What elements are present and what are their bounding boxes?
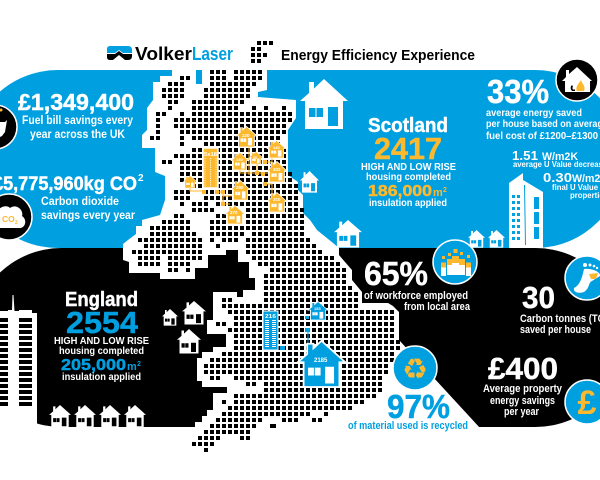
orange tower 5x18 xyxy=(203,148,218,188)
house: small white on blue 2 xyxy=(488,230,505,248)
blue tower 216 xyxy=(263,311,285,350)
orange house 140 right: 140 xyxy=(273,145,280,150)
logo: VolkerLaser: Volker xyxy=(135,44,192,64)
icon: CO2 cloud: 2 xyxy=(15,220,18,226)
icon: house with flame xyxy=(556,59,598,101)
orange house 333 xyxy=(268,162,286,182)
orange house 140 left: 140 xyxy=(236,157,243,162)
panel: black band xyxy=(0,248,600,427)
blue house 2185 xyxy=(300,328,343,386)
text: England stats: housing completed xyxy=(59,346,144,357)
text: England stats: 2554 xyxy=(66,305,139,340)
text: Scotland stats: 186,000 xyxy=(368,183,432,200)
house: large white xyxy=(300,79,348,129)
orange house 270 xyxy=(226,206,244,224)
orange house 220: 220 xyxy=(242,133,250,138)
text: 33 percent energy saved: average energy saved xyxy=(486,107,582,119)
text: 400 pounds savings: £400 xyxy=(488,351,558,386)
text: 97 percent recycled xyxy=(348,388,468,432)
text: carbon dioxide savings: savings every year xyxy=(41,210,135,222)
white house row on black xyxy=(49,405,146,428)
icon: pound coin: £ xyxy=(578,384,597,422)
text: England stats: 2 xyxy=(137,361,141,368)
icon: CO2 cloud xyxy=(0,194,32,240)
text: Scotland stats: m xyxy=(433,187,443,199)
text: England stats: HIGH AND LOW RISE xyxy=(54,336,149,347)
orange house 140 left xyxy=(232,153,248,170)
text: U values: 1.51 xyxy=(512,148,538,163)
map: pixel dots xyxy=(132,72,400,450)
orange house small: 88 xyxy=(253,156,257,160)
map: blue notch xyxy=(196,70,202,84)
text: 65 percent workforce: of workforce employed xyxy=(364,290,468,302)
text: 400 pounds savings: Average property xyxy=(483,383,563,395)
icon: savings circle xyxy=(0,105,17,149)
text: fuel bill savings xyxy=(18,89,134,141)
text: England stats: insulation applied xyxy=(62,372,141,383)
blue house 153 xyxy=(305,302,327,320)
panel: blue band xyxy=(0,70,600,248)
orange house small xyxy=(250,152,262,164)
text: fuel bill savings: £1,349,400 xyxy=(18,89,134,115)
white house group near map xyxy=(162,301,206,354)
icon: recycling: ♻ xyxy=(402,352,428,386)
text: 400 pounds savings: per year xyxy=(504,406,540,418)
blue house 153: 153 xyxy=(314,306,321,311)
orange house 140 right xyxy=(268,141,285,158)
text: 65 percent workforce: from local area xyxy=(404,301,471,313)
text: 97 percent recycled: of material used is recycled xyxy=(348,420,468,432)
orange connectors xyxy=(190,146,272,206)
text: England stats: m xyxy=(127,361,137,373)
text: fuel bill savings: Fuel bill savings every xyxy=(22,115,134,127)
text: 33 percent energy saved: 33% xyxy=(487,73,549,110)
orange house 220 xyxy=(237,127,256,147)
icon: CO2 cloud: CO xyxy=(2,214,15,224)
text: U values: W/m2K xyxy=(542,151,578,163)
text: Scotland stats: HIGH AND LOW RISE xyxy=(361,162,456,173)
text: England stats xyxy=(54,289,149,383)
text: Scotland stats: housing completed xyxy=(366,172,451,183)
text: Scotland stats: 2417 xyxy=(374,131,442,166)
text: England stats: 205,000 xyxy=(61,357,126,374)
blue tower 216: 216 xyxy=(265,314,276,320)
text: U values xyxy=(512,148,600,200)
text: 33 percent energy saved xyxy=(486,73,600,142)
orange tower 5x18: 5x18 xyxy=(204,152,217,158)
text: 97 percent recycled: 97% xyxy=(387,388,450,425)
map: wide dot xyxy=(270,424,276,428)
icon: carbon footprint xyxy=(565,256,600,300)
heading: Energy Efficiency Experience: Energy Efficiency Experience xyxy=(281,48,475,64)
text: carbon dioxide savings xyxy=(0,173,144,222)
orange house 310: 310 xyxy=(273,197,281,202)
text: carbon dioxide savings: Carbon dioxide xyxy=(41,196,119,208)
logo: VolkerLaser: Laser xyxy=(192,44,233,64)
text: England stats: England xyxy=(65,289,138,311)
icon: white tower right xyxy=(509,173,543,248)
orange house 290 xyxy=(232,181,249,200)
map: white UK silhouette xyxy=(123,70,600,480)
house: white at map edge upper xyxy=(300,171,319,193)
icon: recycling xyxy=(393,346,437,390)
orange house 290: 290 xyxy=(236,185,244,190)
text: fuel bill savings: year across the UK xyxy=(30,129,126,141)
icon: dotted F mark xyxy=(251,41,273,63)
house: white at map edge lower xyxy=(334,220,362,247)
logo: VolkerLaser xyxy=(107,44,233,64)
text: 65 percent workforce xyxy=(364,255,471,313)
icon: white tower left xyxy=(0,295,37,427)
blue house 2185: 2185 xyxy=(314,358,328,364)
text: Scotland stats: 2 xyxy=(443,187,447,194)
icon: workers xyxy=(433,240,477,284)
text: Scotland stats: Scotland xyxy=(368,115,448,137)
text: carbon dioxide savings: 2 xyxy=(138,173,144,184)
text: 30 carbon tonnes: 30 xyxy=(522,280,555,315)
icon: pound coin xyxy=(565,380,600,424)
text: 30 carbon tonnes xyxy=(520,280,600,336)
text: Scotland stats: insulation applied xyxy=(369,198,447,209)
orange house 333: 333 xyxy=(273,167,281,172)
orange house 270: 270 xyxy=(230,210,238,215)
orange house small left xyxy=(184,176,196,188)
text: 400 pounds savings xyxy=(483,351,563,418)
house: small white on blue 1 xyxy=(468,230,485,248)
text: 400 pounds savings: energy savings xyxy=(490,395,555,407)
text: 65 percent workforce: 65% xyxy=(364,255,428,292)
text: Scotland stats xyxy=(361,115,456,209)
orange house 310 xyxy=(268,193,286,212)
text: U values: 0.30 xyxy=(543,170,572,185)
